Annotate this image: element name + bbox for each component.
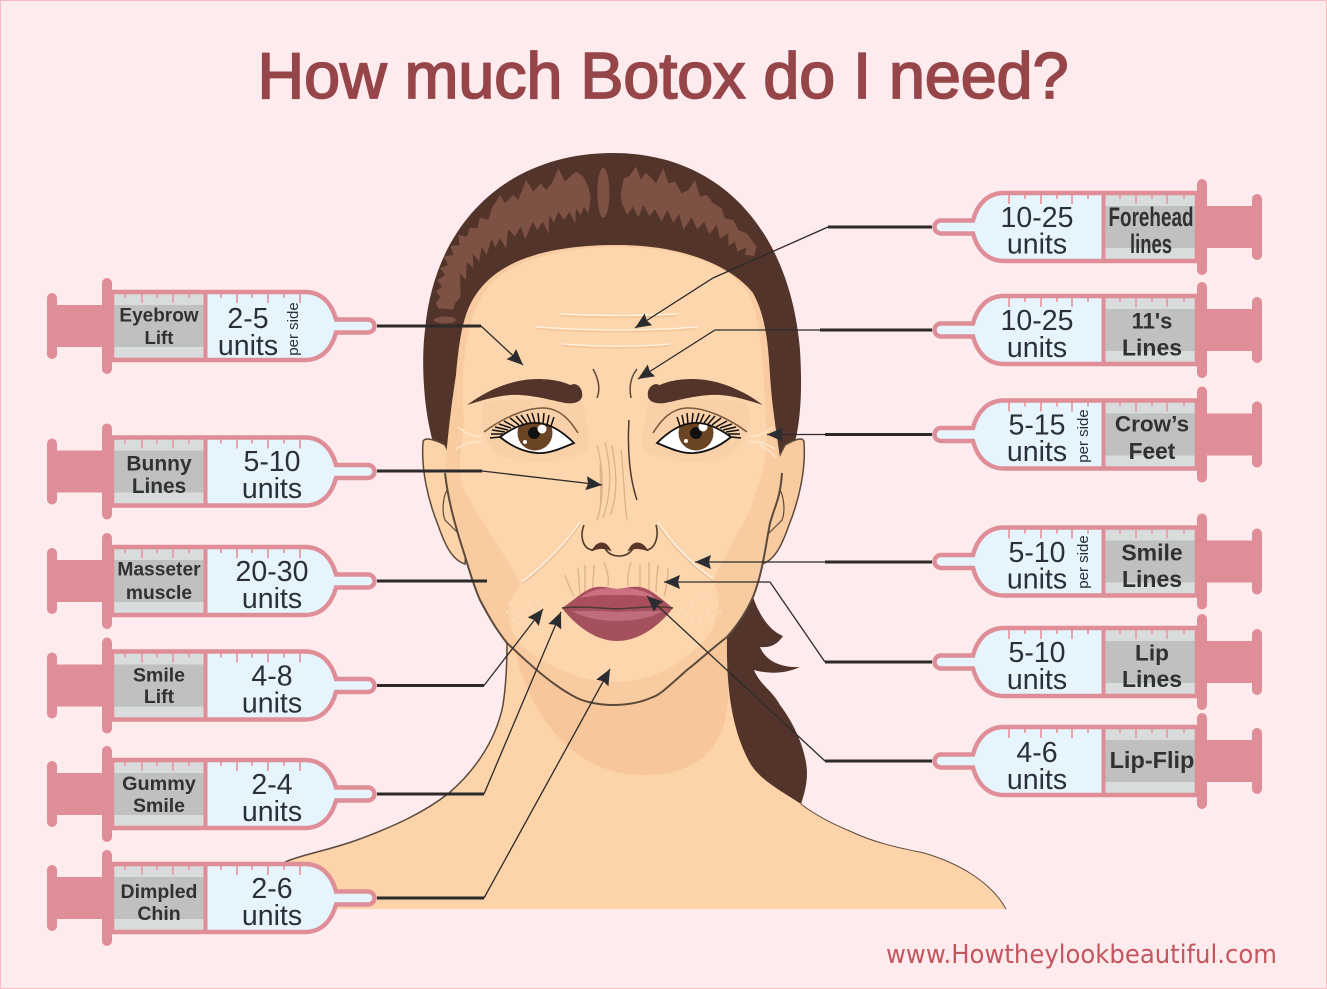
syringe: crow's feet: units — [1007, 436, 1067, 468]
syringe: dimpled chin — [47, 850, 374, 946]
syringe: gummy smile: units — [242, 796, 302, 828]
syringe: forehead lines: 10-25 — [1001, 202, 1073, 234]
syringe: smile lines: Smile — [1121, 540, 1183, 566]
syringe: lip lines: Lines — [1122, 666, 1182, 692]
syringe: eyebrow lift: units — [218, 330, 278, 362]
back hair — [423, 153, 801, 470]
syringe: masseter muscle: 20-30 — [236, 556, 308, 588]
crow's feet wrinkles — [456, 427, 776, 458]
syringe: smile lines: Lines — [1122, 566, 1182, 592]
syringe: bunny lines: Lines — [132, 475, 186, 498]
syringe: crow's feet: per side — [1075, 409, 1092, 463]
syringe: smile lift: Smile — [133, 664, 185, 686]
syringe: masseter muscle: muscle — [126, 583, 192, 604]
line: masseter muscle — [377, 580, 487, 582]
syringe: forehead lines: Forehead — [1108, 202, 1194, 232]
syringe: eyebrow lift: Eyebrow — [119, 306, 199, 326]
syringe: bunny lines: 5-10 — [243, 446, 301, 478]
neck and shoulders — [270, 640, 1006, 909]
arrow: 11's lines — [638, 330, 932, 379]
arrow: dimpled chin — [377, 669, 610, 898]
syringe: smile lines: units — [1007, 564, 1067, 596]
syringe: smile lift — [47, 638, 374, 734]
syringe: masseter muscle: Masseter — [117, 560, 201, 580]
syringe: 11's lines: 10-25 — [1001, 305, 1073, 337]
syringe: forehead lines: units — [1007, 228, 1067, 260]
syringe: gummy smile: Gummy — [122, 773, 196, 795]
syringe: smile lines — [934, 514, 1262, 610]
ears — [423, 439, 470, 564]
smile stipple — [506, 597, 721, 625]
arrow: forehead lines — [635, 227, 932, 328]
syringe: smile lines: per side — [1075, 535, 1092, 589]
syringe: forehead lines: lines — [1130, 229, 1172, 259]
arrow: crow's feet — [767, 433, 932, 436]
lip wrinkles — [565, 562, 668, 596]
syringe: bunny lines — [47, 424, 374, 520]
eye shadows — [482, 399, 749, 462]
syringe: crow's feet: Crow’s — [1115, 412, 1189, 436]
nose bridge line — [628, 420, 637, 500]
syringe: lip lines: Lip — [1135, 640, 1169, 666]
jaw outline — [445, 473, 782, 705]
lips — [562, 587, 673, 641]
syringe: eyebrow lift: per side — [285, 302, 302, 356]
syringe: lip flip: units — [1007, 764, 1067, 796]
syringe: crow's feet — [934, 386, 1262, 482]
syringe: masseter muscle — [47, 533, 374, 629]
syringe: dimpled chin: units — [242, 900, 302, 932]
arrow: gummy smile — [377, 612, 561, 794]
syringe: 11's lines: units — [1007, 332, 1067, 364]
hair highlights — [434, 167, 757, 323]
face shape — [445, 245, 782, 705]
nasolabial folds — [522, 523, 713, 583]
face highlight — [460, 247, 767, 682]
syringe: dimpled chin: 2-6 — [251, 873, 293, 905]
syringe: smile lines: 5-10 — [1008, 537, 1066, 569]
nose — [582, 525, 657, 556]
glabella frown lines — [593, 369, 637, 398]
syringe: gummy smile: 2-4 — [251, 769, 293, 801]
syringe: smile lift: 4-8 — [251, 660, 293, 692]
syringe: forehead lines — [934, 179, 1262, 275]
illustration: woman's face — [270, 153, 1006, 909]
syringe: gummy smile — [47, 746, 374, 842]
syringe: 11's lines — [934, 282, 1262, 378]
syringe: eyebrow lift: 2-5 — [227, 303, 269, 335]
syringe: lip flip: 4-6 — [1016, 737, 1058, 769]
syringe: gummy smile: Smile — [133, 795, 185, 817]
bunny line wrinkles — [597, 442, 627, 520]
arrow: bunny lines — [377, 471, 602, 485]
syringe: dimpled chin: Chin — [137, 903, 181, 925]
arrow: smile lift — [377, 609, 543, 686]
syringe: lip lines — [934, 614, 1262, 710]
syringe: eyebrow lift: Lift — [145, 327, 173, 348]
left eye — [484, 408, 578, 453]
syringe: crow's feet: Feet — [1129, 438, 1176, 464]
right eye — [653, 408, 747, 453]
forehead wrinkles — [537, 314, 697, 347]
ponytail — [727, 597, 807, 804]
syringe: 11's lines: 11's — [1132, 308, 1172, 334]
syringe: lip flip: Lip-Flip — [1110, 747, 1194, 773]
syringe: dimpled chin: Dimpled — [121, 881, 197, 903]
eyebrows — [467, 379, 582, 405]
arrow: lip lines — [664, 582, 932, 662]
arrow: smile lines — [695, 560, 932, 564]
syringe: lip lines: units — [1007, 664, 1067, 696]
syringe: 11's lines: Lines — [1122, 334, 1182, 360]
syringe: lip flip — [934, 713, 1262, 809]
syringe: smile lift: units — [242, 688, 302, 720]
arrow: lip flip — [647, 596, 932, 761]
syringe: bunny lines: units — [242, 473, 302, 505]
chin shadow on neck — [515, 630, 728, 775]
title: How much Botox do I need? — [258, 39, 1068, 112]
arrow: eyebrow lift — [377, 326, 523, 365]
syringe: eyebrow lift — [47, 278, 374, 374]
website footer: www.Howtheylookbeautiful.com — [886, 940, 1277, 970]
syringe: bunny lines: Bunny — [126, 452, 192, 476]
syringe: crow's feet: 5-15 — [1008, 410, 1066, 442]
syringe: lip lines: 5-10 — [1008, 637, 1066, 669]
syringe: smile lift: Lift — [144, 686, 175, 708]
syringe: masseter muscle: units — [242, 583, 302, 615]
